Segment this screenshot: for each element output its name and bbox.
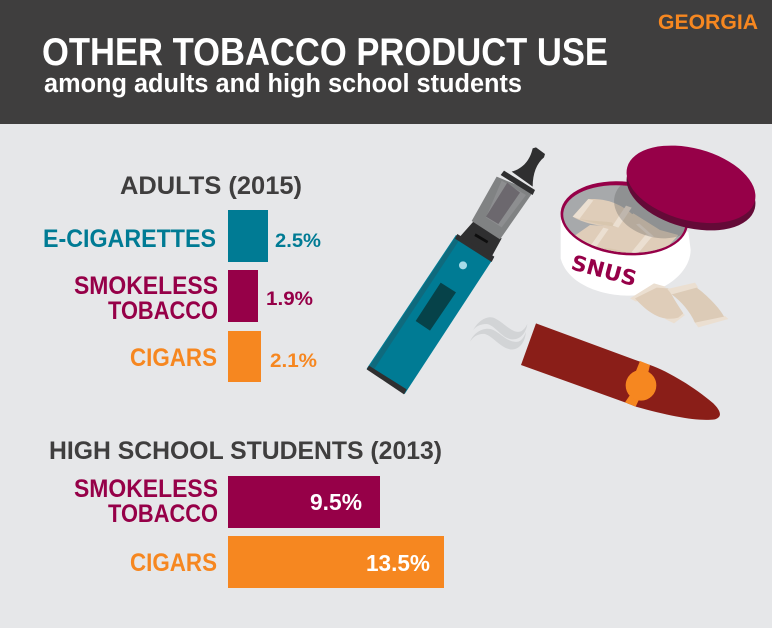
title: OTHER TOBACCO PRODUCT USE [42, 31, 608, 74]
adults smokeless tobacco row: TOBACCO [108, 297, 218, 325]
adults heading: ADULTS (2015) [120, 172, 302, 200]
high school section [49, 437, 444, 588]
adults smokeless tobacco row: SMOKELESS [74, 272, 218, 300]
high school cigars row: 13.5% [366, 550, 430, 576]
icon: snus tin [560, 146, 756, 296]
pouches in tin [572, 186, 685, 253]
icon: cigar [521, 323, 720, 420]
high school cigars row [130, 536, 444, 588]
header band [0, 0, 772, 124]
snus label: SNUS [569, 251, 639, 291]
lid [618, 140, 764, 244]
state label: GEORGIA [658, 11, 758, 34]
adults e-cigarettes row: 2.5% [275, 230, 321, 252]
adults e-cigarettes row: E-CIGARETTES [43, 225, 216, 253]
tin body [561, 220, 691, 296]
adults e-cigarettes row [43, 210, 321, 262]
high school cigars row: CIGARS [130, 549, 217, 577]
adults cigars row: CIGARS [130, 344, 217, 372]
adults section [43, 172, 321, 382]
high school smokeless tobacco row [74, 475, 380, 528]
tin rim [557, 175, 692, 261]
high school smokeless tobacco row: 9.5% [310, 489, 362, 515]
lid shadow [614, 186, 685, 238]
adults cigars row [130, 331, 317, 382]
adults smokeless tobacco row [74, 270, 313, 325]
icon: e-cigarette [367, 147, 545, 394]
adults smokeless tobacco row: 1.9% [266, 288, 313, 310]
adults cigars row: 2.1% [270, 350, 317, 372]
icon: smoke [470, 317, 527, 349]
high school heading: HIGH SCHOOL STUDENTS (2013) [49, 437, 442, 465]
subtitle: among adults and high school students [44, 70, 522, 98]
icon: loose pouches [630, 283, 728, 327]
high school smokeless tobacco row: TOBACCO [108, 500, 218, 528]
high school smokeless tobacco row: SMOKELESS [74, 475, 218, 503]
